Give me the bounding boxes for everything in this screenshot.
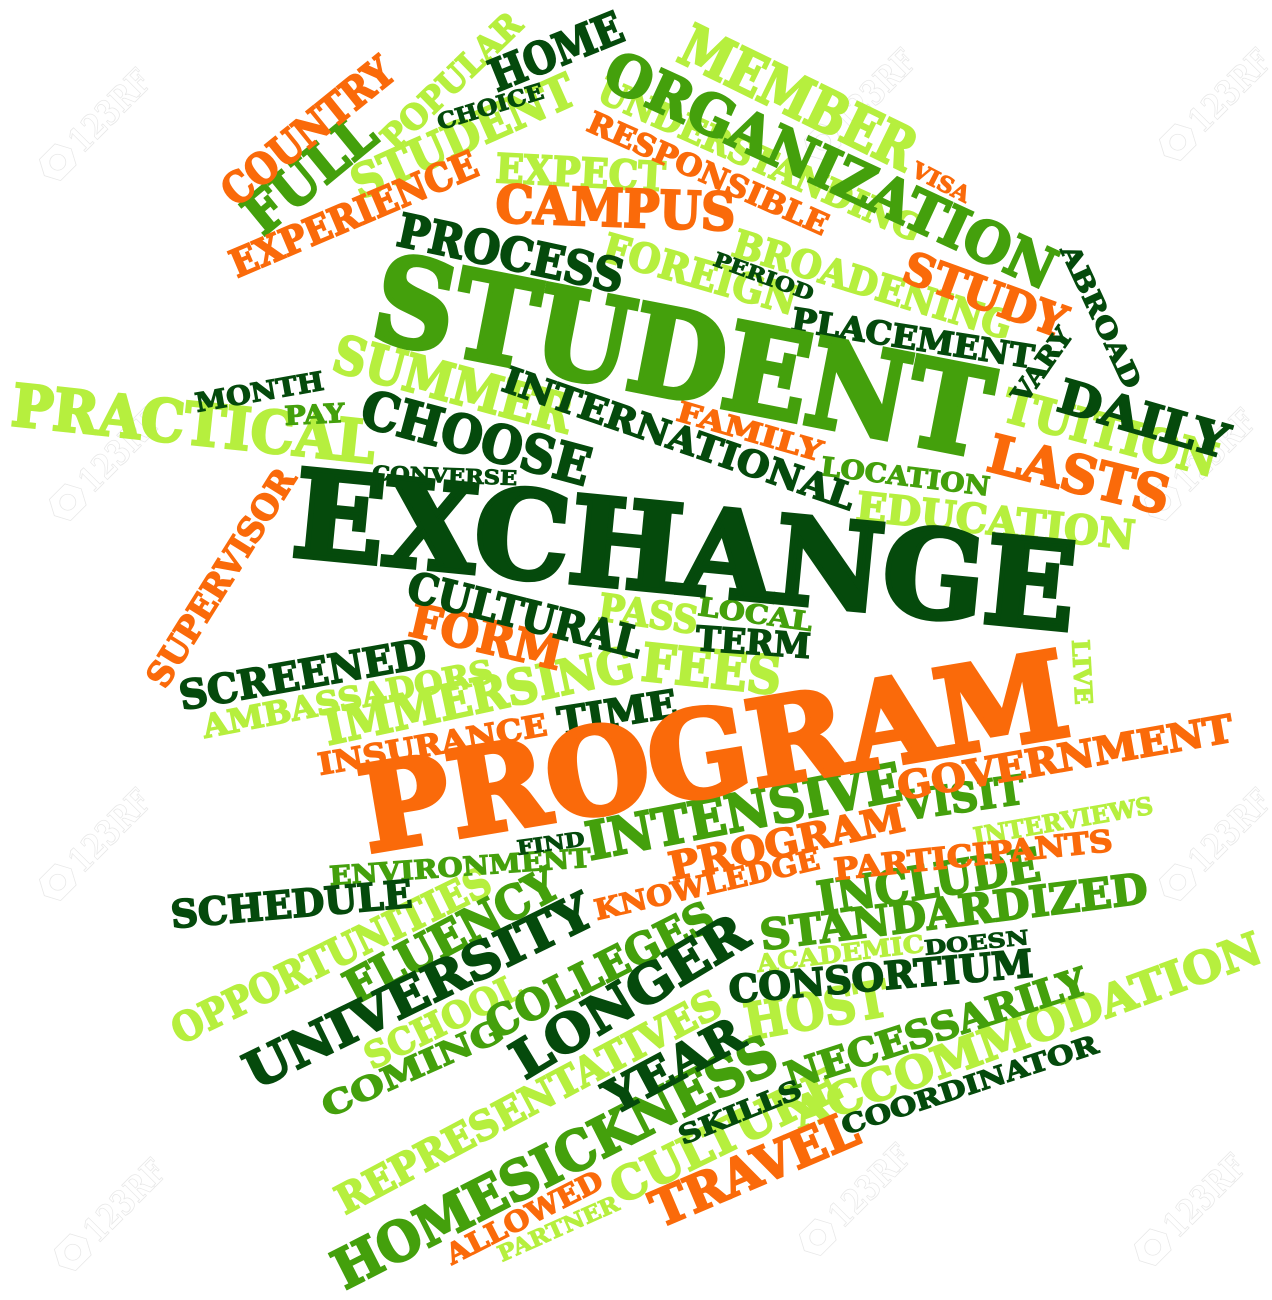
dark green words: CULTURAL — [403, 562, 647, 668]
light green words: PRACTICAL — [9, 371, 379, 477]
dark green words: PROCESS — [393, 203, 629, 304]
light green words: UNDERSTANDING — [591, 70, 928, 251]
light green words: MEMBER — [669, 11, 928, 185]
mid green words — [230, 38, 1150, 1300]
dark green words: SKILLS — [674, 1075, 806, 1151]
dark green words: CHOICE — [434, 79, 547, 136]
light green words: BROADENING — [727, 221, 1018, 348]
mid green words: ORGANIZATION — [594, 38, 1067, 303]
watermark stamps: 123RF — [71, 402, 170, 501]
mid green words: ENVIRONMENT — [328, 844, 593, 892]
watermark stamps: 123RF — [821, 1137, 920, 1236]
orange words: FAMILY — [673, 395, 828, 468]
orange words: COUNTRY — [211, 46, 405, 216]
orange words: KNOWLEDGE — [591, 843, 823, 927]
dark green words: MONTH — [193, 367, 326, 419]
light green words: AMBASSADORS — [198, 652, 496, 746]
light green words: SCHOOL — [358, 966, 529, 1078]
dark green words: SCHEDULE — [169, 871, 414, 937]
mid green words: FLUENCY — [335, 856, 569, 1015]
orange words: PROGRAM — [665, 795, 909, 889]
dark green words: CHOOSE — [355, 379, 597, 498]
light green words: FEES — [639, 632, 784, 708]
mid green words: LOCATION — [819, 452, 992, 503]
dark green words: UNIVERSITY — [234, 881, 603, 1101]
mid green words: INTENSIVE — [581, 752, 907, 873]
light green words: LIVE — [1066, 639, 1098, 705]
mid green words: NECESSARILY — [779, 958, 1093, 1099]
orange words: ALLOWED — [439, 1164, 608, 1272]
light green words: OPPORTUNITIES — [164, 858, 499, 1054]
orange words: FORM — [405, 593, 568, 681]
headline word: PROGRAM: PROGRAM — [350, 625, 1078, 880]
dark green words: ABROAD — [1053, 239, 1146, 393]
light green words: TUITION — [997, 378, 1224, 488]
mid green words: COLLEGES — [477, 892, 722, 1049]
dark green words: PLACEMENT — [789, 300, 1037, 376]
dark green words: COORDINATOR — [838, 1030, 1102, 1142]
mid green words: PAY — [284, 399, 346, 432]
mid green words: HOMESICKNESS — [322, 1022, 787, 1300]
mid green words: INCLUDE — [813, 837, 1044, 926]
mid green words: COMING — [316, 1011, 509, 1125]
orange words: CAMPUS — [495, 174, 737, 243]
orange words: INSURANCE — [315, 708, 550, 783]
mid green words: VISIT — [899, 766, 1027, 830]
orange words: TRAVEL — [642, 1099, 867, 1239]
light green words: EXPECT — [494, 145, 667, 201]
watermark stamps: 123RF — [76, 1152, 175, 1251]
orange words: GOVERNMENT — [894, 706, 1236, 809]
headline word: STUDENT: STUDENT — [362, 228, 1003, 486]
mid green words: FULL — [230, 100, 389, 247]
dark green words: FIND — [515, 827, 586, 860]
mid green words: LOCAL — [696, 592, 814, 638]
dark green words: CONSORTIUM — [727, 941, 1035, 1012]
dark green words: DOESN — [923, 925, 1030, 960]
dark green words: TERM — [694, 619, 812, 667]
light green words: INTERVIEWS — [971, 791, 1155, 851]
dark green words: INTERNATIONAL — [497, 359, 861, 519]
light green words: SUMMER — [327, 324, 580, 446]
orange words: STUDY — [896, 242, 1074, 349]
light green words: IMMERSING — [319, 636, 639, 757]
orange words: LASTS — [982, 423, 1176, 527]
light green words: ACCOMMODATION — [785, 923, 1269, 1141]
dark green words: DAILY — [1052, 369, 1236, 469]
orange words: EXPERIENCE — [223, 141, 484, 286]
watermark stamps: 123RF — [826, 42, 925, 141]
watermark stamps: 123RF — [61, 62, 160, 161]
light green words: PASS — [596, 584, 701, 643]
dark green words — [169, 2, 1236, 1151]
light green words: EDUCATION — [854, 483, 1137, 559]
dark green words: LONGER — [500, 902, 760, 1091]
light green words: ACADEMIC — [754, 929, 925, 978]
light green words: STUDENT — [343, 63, 584, 210]
light green words: FOREIGN — [597, 224, 802, 325]
light green words: CULTURE — [601, 1057, 850, 1215]
dark green words: SCREENED — [176, 630, 430, 720]
orange words: PARTICIPANTS — [832, 824, 1114, 888]
dark green words: CONVERSE — [372, 461, 518, 490]
light green words: PARTNER — [494, 1191, 624, 1267]
dark green words: VARY — [1006, 322, 1080, 410]
watermark stamps: 123RF — [61, 782, 160, 881]
light green words: REPRESENTATIVES — [328, 980, 729, 1224]
dark green words: YEAR — [594, 1006, 753, 1125]
watermark stamps: 123RF — [1156, 1147, 1255, 1246]
orange words: RESPONSIBLE — [582, 105, 834, 243]
headline word: EXCHANGE: EXCHANGE — [287, 444, 1082, 659]
dark green words: TIME — [554, 681, 680, 744]
dark green words: PERIOD — [710, 247, 817, 306]
mid green words: STANDARDIZED — [757, 864, 1150, 960]
orange words: VISA — [906, 157, 975, 209]
light green words: HOST — [740, 969, 893, 1052]
orange words: SUPERVISOR — [139, 461, 305, 695]
light green words: POPULAR — [373, 4, 531, 158]
